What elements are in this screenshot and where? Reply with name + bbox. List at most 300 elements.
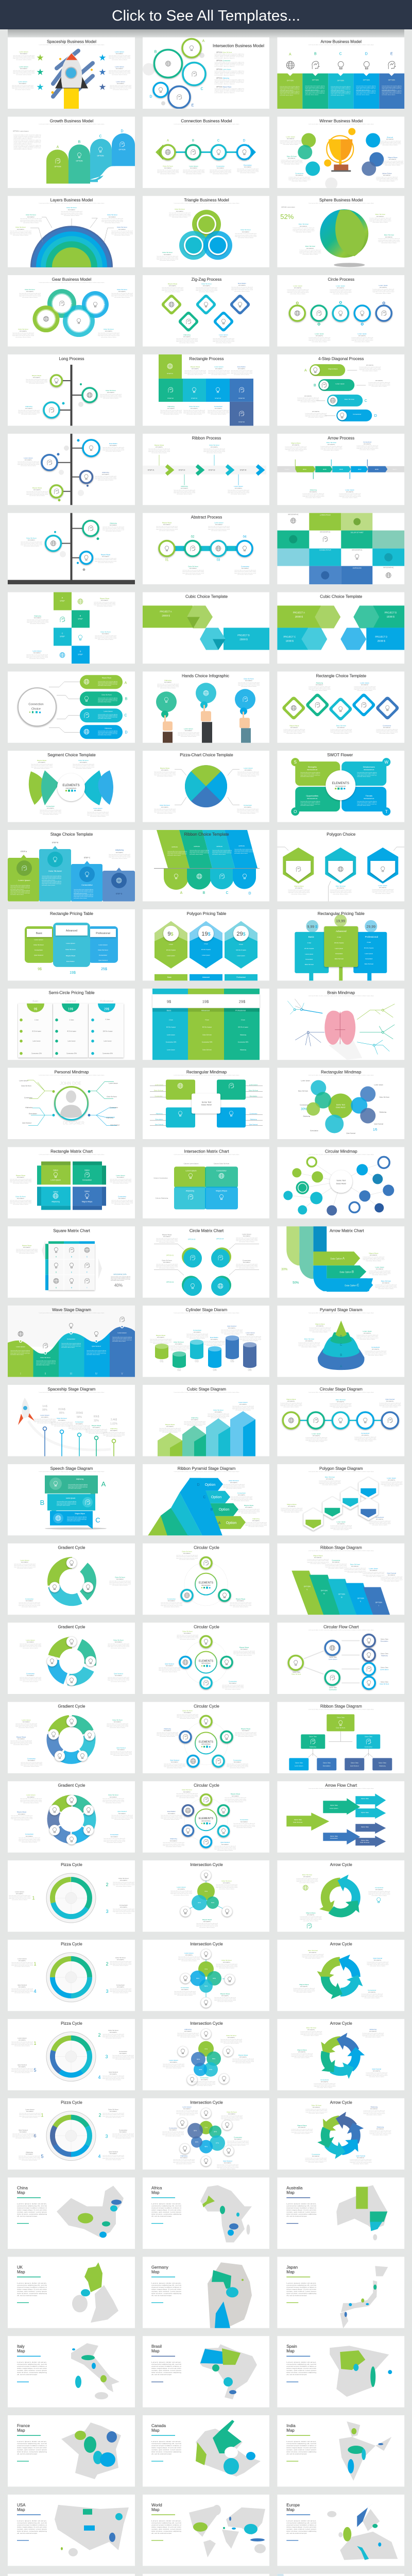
header shadow bbox=[8, 29, 404, 39]
arrows bbox=[317, 2110, 364, 2161]
panel: Rectangular Mindmap B bbox=[277, 1068, 404, 1140]
labels: Lorem Ipsum bbox=[184, 727, 193, 730]
descending strips: OPTION bbox=[304, 1586, 311, 1588]
stars and labels: Lorem Ipsum bbox=[116, 80, 125, 82]
circles bbox=[154, 1238, 259, 1296]
rings bbox=[289, 301, 391, 325]
ribbon band: STEP 02 bbox=[179, 469, 185, 471]
slanted ribbons: B bbox=[203, 891, 205, 895]
price table: 80 Gb of space bbox=[202, 1026, 212, 1028]
labels: Consectetur bbox=[25, 1598, 33, 1600]
labels: Adipiscing bbox=[370, 2106, 377, 2108]
labels: Lorem Ipsum bbox=[379, 885, 388, 887]
bubble cluster: Dolor Sit Amet bbox=[298, 1090, 308, 1092]
pricing cards: Dolor Sit Amet bbox=[65, 948, 76, 951]
panel: Africa Map bbox=[143, 2177, 270, 2249]
labels: Consectetur bbox=[46, 805, 55, 807]
labels bbox=[26, 597, 116, 659]
rocket illustration bbox=[52, 50, 93, 109]
labels bbox=[161, 1551, 251, 1607]
bubble cluster: Quis Nostrud bbox=[374, 1123, 383, 1125]
map bbox=[200, 2185, 252, 2242]
bubble cluster: Lorem Ipsum bbox=[374, 1084, 384, 1086]
bubbles: 56% bbox=[194, 2130, 197, 2132]
ring chain bbox=[159, 536, 252, 562]
price bubbles: Consectetur bbox=[365, 958, 373, 960]
panel: Geometric Placeholder bbox=[277, 2574, 404, 2576]
labels bbox=[293, 1950, 389, 1999]
labels bbox=[157, 677, 260, 737]
labels: Dolor Sit Amet bbox=[312, 2105, 321, 2107]
flow rings: Option Data bbox=[381, 1638, 388, 1640]
labels: 40% bbox=[114, 1283, 123, 1287]
heading: Intersection Cycle bbox=[190, 2021, 223, 2026]
map heading: UK bbox=[17, 2265, 23, 2269]
labels: Dolor Sit Amet bbox=[15, 226, 26, 228]
pricing columns: 1 User bbox=[35, 1019, 39, 1021]
bubbles: 56% bbox=[212, 2058, 215, 2060]
labels: Lorem Ipsum bbox=[360, 682, 370, 684]
labels: Adipiscing bbox=[170, 1838, 177, 1840]
ribbon band: STEP 03 bbox=[209, 469, 215, 471]
arrows bbox=[315, 1951, 366, 2002]
heading: Square Matrix Chart bbox=[53, 1228, 91, 1233]
numbers and labels: Lorem Ipsum bbox=[18, 1958, 27, 1960]
pricing columns: 2 Users bbox=[70, 1019, 74, 1021]
labels: Adipiscing bbox=[110, 522, 117, 524]
cylinders bbox=[155, 1335, 256, 1372]
branch labels: Exercitation bbox=[29, 1113, 37, 1115]
panel: Gradient Cycle 6 bbox=[8, 1781, 135, 1853]
bubbles bbox=[177, 2108, 234, 2166]
org chart: Option Data bbox=[337, 1716, 345, 1718]
labels: Consectetur bbox=[25, 1833, 33, 1835]
heading: Personal Mindmap bbox=[55, 1070, 89, 1075]
arch columns: A bbox=[57, 145, 59, 149]
numbers and labels: 5 bbox=[33, 2067, 37, 2073]
stage labels: STEP B bbox=[52, 842, 59, 844]
numbers and labels: 3 bbox=[106, 1909, 109, 1914]
pricing cards: 19$ bbox=[70, 971, 76, 975]
ring cluster: D bbox=[149, 95, 152, 99]
labels bbox=[148, 444, 249, 495]
ribbon band: STEP 04 bbox=[240, 469, 247, 471]
panel: Pizza-Chart Choice Template bbox=[143, 751, 269, 822]
swot blocks: W bbox=[385, 760, 389, 765]
org chart: Adipiscing bbox=[310, 1745, 316, 1748]
stage labels: STEP A bbox=[21, 851, 27, 853]
labels: Dolor Sit Amet bbox=[106, 389, 116, 392]
five columns: B bbox=[314, 53, 317, 56]
panel: Zig-Zag Process bbox=[143, 275, 269, 346]
panel: Rectangle Process bbox=[143, 354, 269, 426]
panel: Ribbon Stage Diagram A bbox=[277, 1544, 404, 1615]
heading: Circular Cycle bbox=[194, 1546, 219, 1550]
map heading: Brasil bbox=[151, 2344, 162, 2349]
matrix: Consectetur bbox=[82, 1179, 92, 1181]
stage columns: Consectetur bbox=[81, 884, 93, 886]
flow rings: Option Data bbox=[293, 1671, 300, 1673]
numbers and labels bbox=[12, 2109, 134, 2161]
heading: Circular Stage Diagram bbox=[320, 1387, 363, 1392]
lollipop bars bbox=[43, 1427, 115, 1456]
stars and labels: Lorem Ipsum bbox=[19, 50, 28, 53]
panel: Hands Choice Infographic bbox=[143, 672, 269, 743]
map heading: Japan bbox=[286, 2265, 298, 2269]
heading: Sphere Business Model bbox=[319, 198, 363, 202]
heading: Circular Cycle bbox=[194, 1625, 219, 1629]
labels bbox=[291, 2105, 391, 2164]
labels: Exercitation bbox=[109, 443, 117, 445]
panel: Polygon Pricing Table bbox=[143, 909, 269, 981]
grid: I bbox=[87, 1286, 88, 1289]
circles and labels: Eiusmod bbox=[387, 136, 393, 138]
hexagons bbox=[277, 847, 404, 902]
arrow timeline bbox=[277, 460, 404, 479]
numbers and labels: Lorem Ipsum bbox=[25, 2109, 35, 2111]
swot blocks: Threats bbox=[366, 794, 372, 797]
labels: 52% bbox=[280, 213, 294, 221]
values: 60k$ bbox=[94, 1415, 99, 1418]
labels: Consectetur bbox=[200, 2077, 209, 2079]
matrix: Adipiscing bbox=[186, 1190, 194, 1192]
map heading: Map bbox=[17, 2428, 25, 2433]
ring row bbox=[283, 1412, 398, 1429]
labels: Consectetur bbox=[237, 1492, 246, 1494]
labels: Lorem Ipsum bbox=[169, 2059, 178, 2061]
panel: Segment Choice Template bbox=[8, 751, 135, 822]
labels: Magna Aliqua bbox=[154, 444, 164, 446]
ring chain: 02 bbox=[191, 536, 195, 539]
panel: Intersection Cycle 6 bbox=[143, 2098, 270, 2170]
bubbles: 51% bbox=[204, 1985, 208, 1987]
arch columns: OPTION bbox=[97, 155, 104, 157]
heading: Pizza Cycle bbox=[61, 1942, 82, 1946]
heading: Intersection Cycle bbox=[190, 1862, 223, 1867]
heading: Intersection Cycle bbox=[190, 1942, 223, 1946]
branch labels: Adipiscing bbox=[25, 1107, 32, 1109]
labels: Magna Aliqua bbox=[241, 1727, 250, 1730]
price bubbles: 2 User bbox=[367, 941, 371, 943]
cycle bbox=[180, 1716, 232, 1767]
labels bbox=[287, 284, 394, 343]
map bbox=[57, 2185, 124, 2238]
four blocks: Quis Nostrud bbox=[249, 1124, 258, 1126]
heading: Rectangular Pricing Table bbox=[318, 911, 365, 916]
map heading: Italy bbox=[17, 2344, 25, 2349]
wave columns: Dolor Sit Amet bbox=[40, 1357, 50, 1359]
panel: Abstract Process bbox=[143, 513, 269, 584]
panel: Cubic Choice Template B bbox=[277, 592, 405, 664]
chain of rings: C bbox=[217, 139, 220, 142]
panel: Growth Business Model bbox=[8, 116, 135, 188]
arrow timeline: 2014 bbox=[303, 468, 306, 470]
ring cluster: E bbox=[192, 104, 194, 107]
heading: Arrow Cycle bbox=[330, 1942, 352, 1946]
bubbles: 51% bbox=[211, 1902, 214, 1904]
four blocks: Exercitation bbox=[250, 1095, 258, 1097]
labels: Dolor Sit Amet bbox=[213, 1409, 224, 1411]
ribbon pyramid: C bbox=[203, 1496, 206, 1499]
panel: Gear Business Model bbox=[8, 275, 135, 346]
labels: Dolor Sit Amet bbox=[188, 566, 198, 568]
hex columns: Lorem ipsum bbox=[202, 954, 211, 956]
numbers and labels: 1 bbox=[33, 2041, 37, 2046]
price table: Consectetur 40% bbox=[202, 1041, 213, 1043]
labels: Magna Aliqua bbox=[287, 1503, 297, 1505]
pills bbox=[304, 364, 377, 421]
stage labels: STEP D bbox=[116, 893, 123, 895]
pills: C bbox=[365, 399, 367, 403]
labels: Dolor Sit Amet bbox=[375, 213, 385, 215]
panel: Rectangle Pricing Table bbox=[8, 909, 135, 981]
org chart: Option Data bbox=[309, 1735, 317, 1737]
green and cyan project bands: 20000 $ bbox=[162, 614, 170, 617]
wave columns: Quis Nostrud bbox=[92, 1345, 101, 1347]
option pills: Magna Aliqua bbox=[102, 676, 111, 679]
panel: Speech Stage Diagram bbox=[8, 1464, 135, 1536]
panel: Rectangle Matrix Chart bbox=[8, 1147, 135, 1218]
stars and labels: Lorem Ipsum bbox=[18, 80, 27, 82]
labels: Consectetur bbox=[233, 1759, 242, 1761]
numbers and labels: Dolor Sit Amet bbox=[108, 2029, 118, 2031]
stacked columns bbox=[54, 592, 90, 664]
numbers and labels: 3 bbox=[106, 1989, 109, 1994]
heading: Abstract Process bbox=[191, 515, 222, 520]
branch labels: Consectetur bbox=[110, 1107, 118, 1109]
labels: Consectetur bbox=[181, 1987, 189, 1989]
heading: Speech Stage Diagram bbox=[50, 1466, 93, 1471]
stars and labels: Lorem Ipsum bbox=[115, 50, 124, 53]
labels: Adipiscing bbox=[376, 2126, 384, 2128]
org chart: Option Data bbox=[295, 1761, 303, 1764]
pricing columns: Consectetur 60% bbox=[102, 1053, 113, 1055]
bubble cluster: Lorem Ipsum bbox=[301, 1080, 311, 1082]
labels: Consectetur bbox=[167, 1598, 176, 1600]
heading: Arrow Flow Chart bbox=[325, 1783, 357, 1788]
swot blocks: INFOGRAPHIC bbox=[335, 785, 347, 787]
labels bbox=[150, 1325, 261, 1351]
circles and labels bbox=[280, 133, 404, 182]
map heading bbox=[17, 2344, 25, 2353]
labels bbox=[16, 1244, 130, 1287]
labels bbox=[12, 289, 133, 338]
hex columns: Advanced bbox=[202, 976, 210, 978]
price bubbles: 9,99 $ bbox=[307, 925, 317, 929]
matrix: Consectetur bbox=[216, 1170, 227, 1172]
labels bbox=[159, 1401, 254, 1433]
labels: Dolor Sit Amet bbox=[182, 1789, 192, 1791]
swot blocks: S bbox=[294, 760, 297, 765]
labels: Consectetur bbox=[193, 1329, 201, 1331]
cycle bbox=[181, 1557, 230, 1606]
heading: Rectangle Choice Template bbox=[316, 673, 367, 678]
price bubbles: Lorem ipsum bbox=[305, 953, 314, 955]
numbers and labels: 5 bbox=[41, 2154, 44, 2159]
panel: Sphere Business Model bbox=[277, 196, 405, 267]
arrows: Option Data bbox=[361, 1839, 369, 1841]
heading: Rectangle Matrix Chart bbox=[50, 1149, 93, 1154]
heading: Rectangular Mindmap bbox=[186, 1070, 227, 1075]
labels: Lorem Ipsum bbox=[24, 457, 33, 459]
labels: Magna Aliqua bbox=[313, 1555, 323, 1557]
labels: Magna Aliqua bbox=[156, 1334, 165, 1336]
option list: OPTION: Adipiscing bbox=[216, 77, 229, 79]
panel: staggered steps bbox=[8, 592, 135, 664]
heading: Growth Business Model bbox=[50, 118, 93, 123]
labels: Quis Nostrud bbox=[373, 1957, 382, 1959]
labels: Dolor Sit Amet bbox=[308, 1950, 318, 1952]
heading: Wave Stage Diagram bbox=[52, 1308, 91, 1312]
price bubbles bbox=[295, 914, 387, 981]
pricing columns: Advanced bbox=[65, 1000, 76, 1003]
descending strips: OPTION bbox=[321, 1590, 328, 1592]
price table bbox=[152, 989, 260, 1060]
panel: Circular Cycle 5 bbox=[143, 1702, 270, 1773]
org chart: Adipiscing bbox=[379, 1765, 386, 1767]
panel: Circular Flow Chart B bbox=[143, 2574, 270, 2576]
org chart: Dolor Sit Amet bbox=[336, 1726, 345, 1728]
grid: B bbox=[71, 1256, 72, 1258]
flow rings: Dolor Sit Amet bbox=[291, 1673, 301, 1675]
four project bands: PROJECT A bbox=[293, 611, 305, 614]
pizza bbox=[45, 1872, 97, 1924]
pricing columns: Basic bbox=[32, 1000, 39, 1003]
labels: Adipiscing bbox=[181, 485, 188, 487]
labels: Magna Aliqua bbox=[299, 1984, 309, 1986]
leaf segments bbox=[29, 770, 113, 805]
bubbles: 71% bbox=[204, 2048, 208, 2050]
stars and labels: ★ bbox=[98, 53, 107, 63]
arch columns bbox=[46, 129, 135, 183]
hex columns: 29$ bbox=[236, 931, 246, 937]
sphere bbox=[320, 209, 368, 267]
labels bbox=[157, 164, 259, 175]
ribbon band bbox=[143, 455, 266, 485]
labels: Consectetur bbox=[240, 1819, 248, 1821]
labels bbox=[20, 1639, 129, 1682]
descending strips bbox=[291, 1571, 390, 1615]
bubble cluster: Quis Nostrud bbox=[347, 1132, 355, 1134]
text block bbox=[286, 2514, 317, 2541]
map bbox=[72, 2262, 118, 2323]
numbers and labels: Consectetur bbox=[119, 2129, 127, 2131]
swot blocks bbox=[291, 758, 390, 816]
labels: Dolor Sit Amet bbox=[26, 537, 37, 539]
panel: France Map bbox=[8, 2415, 135, 2487]
labels: Dolor Sit Amet bbox=[221, 1880, 232, 1882]
heading: Circular Mindmap bbox=[325, 1149, 357, 1154]
stacked columns: C bbox=[62, 632, 63, 634]
five columns: OPTION bbox=[388, 79, 395, 81]
portrait: DESIGNER bbox=[63, 1121, 84, 1126]
numbers and labels: Consectetur bbox=[119, 2050, 127, 2053]
cylinders: 02 bbox=[177, 1368, 181, 1372]
green and cyan project bands: PROJECT B bbox=[237, 634, 250, 636]
labels: Consectetur bbox=[375, 1516, 384, 1518]
labels: Magna Aliqua bbox=[22, 1244, 31, 1246]
price table: Professional bbox=[235, 1010, 246, 1012]
labels bbox=[281, 1476, 403, 1531]
network: Goes Here! bbox=[336, 1182, 346, 1184]
price bubbles: Lorem ipsum bbox=[335, 947, 344, 950]
labels: Adipiscing bbox=[183, 334, 191, 336]
text block bbox=[286, 2435, 317, 2462]
map heading: Map bbox=[151, 2269, 160, 2274]
labels: Lorem Ipsum bbox=[214, 522, 224, 524]
price table: Adipiscing bbox=[240, 1049, 247, 1051]
hex columns: 100 Gb of space bbox=[236, 949, 246, 951]
map bbox=[327, 2501, 398, 2560]
price table: Consectetur 20% bbox=[166, 1041, 177, 1043]
heading: Rectangle Pricing Table bbox=[50, 911, 94, 916]
cylinders: 06 bbox=[248, 1368, 252, 1372]
labels: Consectetur bbox=[244, 804, 252, 806]
map heading: Map bbox=[286, 2428, 295, 2433]
pricing cards: Exercitation bbox=[66, 960, 75, 962]
labels bbox=[163, 2028, 254, 2087]
ribbon pyramid: Option bbox=[226, 1521, 236, 1525]
map heading: Map bbox=[17, 2349, 25, 2353]
map heading: France bbox=[17, 2424, 30, 2428]
values: 2,4k$ bbox=[111, 1418, 117, 1421]
slanted ribbons bbox=[154, 830, 260, 895]
labels: Quis Nostrud bbox=[114, 1672, 123, 1674]
hex columns: Basic bbox=[167, 976, 171, 978]
hex steps bbox=[303, 1477, 378, 1531]
ribbon pyramid: Option bbox=[219, 1508, 229, 1512]
panel: Arrow Process bbox=[277, 434, 405, 505]
text block bbox=[17, 2356, 47, 2382]
stacked columns: STEP bbox=[60, 635, 65, 637]
timeline with base bbox=[8, 513, 135, 585]
heading: Cubic Stage Diagram bbox=[187, 1387, 226, 1392]
arrows: Option Data bbox=[330, 1804, 338, 1806]
colour grid: CONSECTETUR bbox=[319, 549, 332, 551]
circles: OPTION 02 bbox=[166, 1281, 174, 1283]
panel: Brain Mindmap bbox=[277, 989, 405, 1060]
bubbles: 50% bbox=[195, 2141, 198, 2143]
labels: Quis Nostrud bbox=[372, 2068, 381, 2070]
descending strips: OPTION bbox=[357, 1598, 364, 1600]
branch labels: Dolor Sit Amet bbox=[21, 1085, 31, 1087]
circles and labels: Lorem Ipsum bbox=[286, 135, 296, 138]
mindmap branches bbox=[27, 1080, 117, 1126]
option pills: Lorem Ipsum bbox=[104, 710, 113, 712]
flow rings: Lorem Ipsum bbox=[380, 1668, 389, 1670]
labels: Lorem Ipsum bbox=[26, 1794, 36, 1796]
option pills: Dolor Sit Amet bbox=[101, 693, 112, 696]
network bbox=[283, 1157, 394, 1215]
labels: Lorem Ipsum bbox=[336, 285, 346, 287]
pills: Consectetur bbox=[353, 413, 361, 415]
numbers and labels: 1 bbox=[32, 1895, 35, 1901]
four project bands: 20000 $ bbox=[295, 615, 303, 618]
cycle ring bbox=[45, 1714, 97, 1766]
panel: Stage Choice Template bbox=[8, 830, 135, 902]
map heading: China bbox=[17, 2185, 28, 2190]
pricing cards: Quis Nostrud bbox=[98, 959, 108, 961]
labels bbox=[170, 1880, 237, 1928]
ring cluster: B bbox=[154, 50, 157, 54]
labels: Quis Nostrud bbox=[223, 2160, 232, 2162]
price bubbles: 1 User bbox=[307, 942, 311, 944]
map bbox=[61, 2422, 121, 2479]
numbers and labels: Lorem Ipsum bbox=[15, 1891, 24, 1893]
arrows: Dolor Sit Amet bbox=[293, 1821, 302, 1823]
heading: Rectangle Process bbox=[189, 357, 224, 361]
map heading: USA bbox=[17, 2503, 26, 2507]
